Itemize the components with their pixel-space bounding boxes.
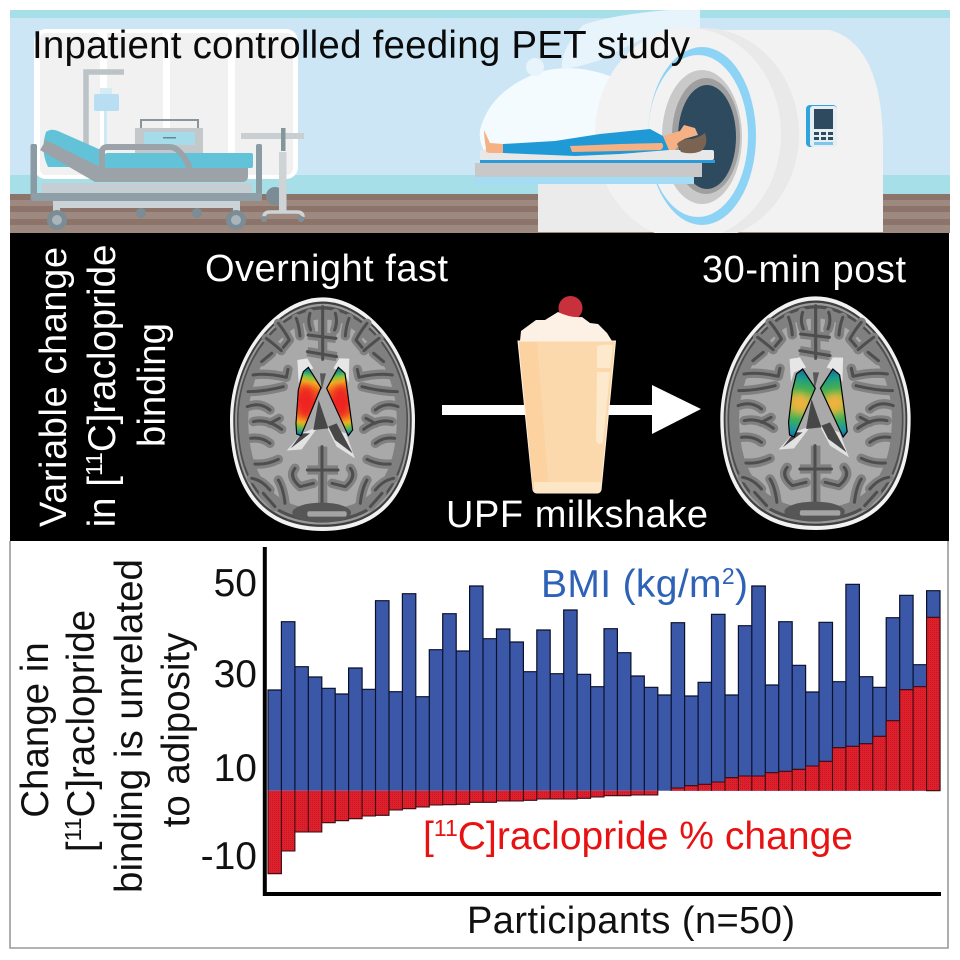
wall skirting band [10,175,950,195]
icon: scanner table [475,150,715,184]
striped floor [10,194,950,233]
rotated label: binding is unrelated: binding is unrelated [108,559,151,893]
panel background [10,233,949,541]
icon: overbed table [241,128,304,222]
y axis tick labels: 30 [214,653,257,696]
y axis tick labels: 50 [214,562,257,605]
panel: chart [14,547,941,942]
rotated label: raclopride: [ [60,841,103,852]
rotated label: raclopride: 11 [60,817,86,841]
rotated label: raclopride: C]raclopride [60,610,103,817]
icon: IV pole and bag [86,72,124,145]
icon: milkshake [518,296,616,493]
background panel frame [10,233,948,948]
legend: BMI: BMI (kg/m [541,563,722,606]
rotated label: change in: Change in [14,642,57,818]
rotated label: in raclopride: C]raclopride [81,245,124,452]
legend: raclopride percent change: 11 [434,815,458,841]
icon: hospital bed [30,130,262,230]
legend: BMI: ) [735,563,748,606]
rotated label: binding: binding [131,323,174,447]
rotated label: in raclopride: 11 [81,452,107,476]
legend: raclopride percent change: C]raclopride % change [458,815,853,858]
red raclopride bars [268,617,940,874]
top wall stripe [10,10,950,18]
legend: raclopride percent change: [ [423,815,434,858]
title: Inpatient controlled feeding PET study: Inpatient controlled feeding PET study [32,24,691,67]
brain after [720,296,911,530]
blue BMI bars [268,584,940,791]
y axis tick labels: -10 [201,835,257,878]
label: overnight fast: Overnight fast [205,248,448,290]
icon: bedside cabinet [135,120,203,156]
rotated label: to adiposity: to adiposity [155,632,198,827]
brain before [230,297,415,531]
y axis tick labels [201,562,257,878]
window [34,29,298,179]
label: 30-min post: 30-min post [702,249,906,291]
clouds behind scanner [480,10,700,150]
room wall [10,18,950,175]
icon: scanner control panel [806,105,837,147]
panel: hospital and PET scanner scene [10,8,950,240]
y axis tick labels: 10 [214,747,257,790]
chart axes [265,547,941,894]
icon: patient lying down [484,125,706,156]
rotated label: variable change: Variable change [33,247,75,527]
rotated label: in raclopride: in [ [81,476,124,527]
label: UPF milkshake: UPF milkshake [446,494,708,536]
icon: PET scanner [538,28,883,240]
arrow [442,385,701,434]
legend: BMI: 2 [722,563,735,589]
panel: black milkshake panel [10,233,949,541]
x axis label: Participants (n=50) [467,900,795,942]
